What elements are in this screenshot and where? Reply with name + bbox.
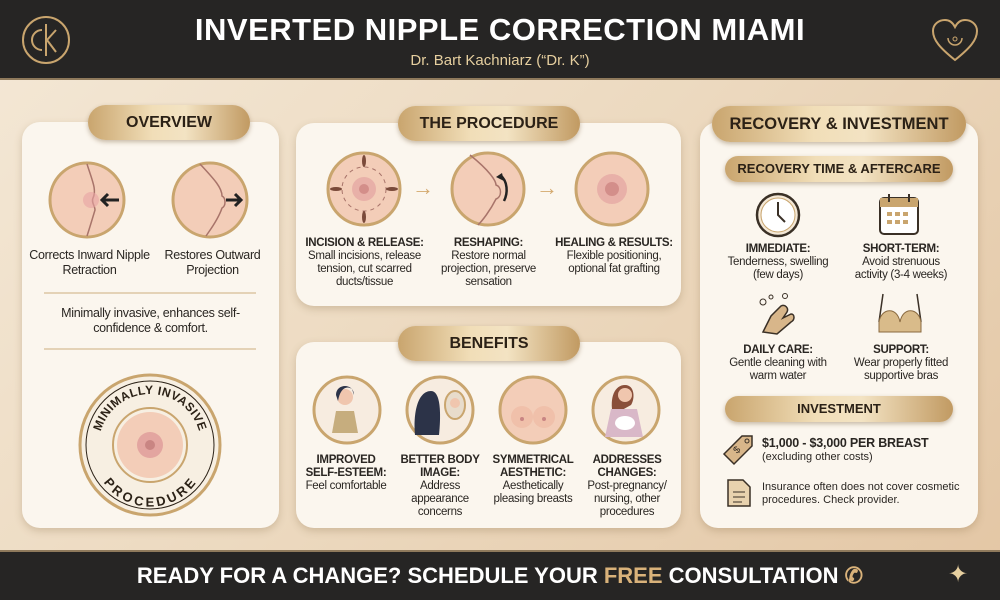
- icon: heart: [932, 19, 978, 62]
- text: immediate: Tenderness, swelling (few days): [728, 256, 828, 281]
- text: support: SUPPORT:: [873, 344, 929, 356]
- text: better body image: Address appearance concerns: [411, 480, 469, 518]
- text: symmetrical: [492, 454, 574, 505]
- icon: washing hand: [760, 293, 795, 335]
- title: INVERTED NIPPLE CORRECTION MIAMI: [195, 12, 805, 47]
- icon: inward nipple: [48, 162, 126, 238]
- text: minimally invasive summary: Minimally invasive, enhances self-confidence & comfort.: [61, 306, 240, 335]
- panel: benefits: [296, 342, 681, 528]
- text: immediate: IMMEDIATE:: [746, 243, 810, 255]
- badge: minimally invasive procedure: [78, 374, 222, 516]
- text: daily care: Gentle cleaning with warm water: [729, 357, 827, 382]
- text: symmetrical: SYMMETRICAL AESTHETIC:: [492, 454, 574, 479]
- text: addresses changes: Post-pregnancy/ nursing, other procedures: [587, 480, 667, 518]
- text: restores outward: Restores Outward Projection: [165, 248, 260, 277]
- text: healing: HEALING & RESULTS:: [555, 237, 673, 249]
- heading: overview: [88, 105, 250, 140]
- icon: healed: [574, 152, 650, 226]
- badge: minimally invasive procedure: PROCEDURE: [104, 477, 196, 507]
- subheading: investment: INVESTMENT: [797, 401, 881, 416]
- panel: procedure: [296, 123, 681, 306]
- panel: recovery & investment: [700, 122, 978, 528]
- heading: recovery & investment: [712, 106, 966, 142]
- icon: calendar: [879, 194, 919, 235]
- heading: benefits: [398, 326, 580, 361]
- text: immediate: [728, 243, 828, 281]
- text: improved self-esteem: IMPROVED SELF-ESTEEM:: [306, 454, 386, 479]
- text: improved self-esteem: [306, 454, 386, 492]
- icon: price tag: [723, 435, 753, 465]
- icon: body image: [406, 376, 474, 444]
- text: healing: [555, 237, 673, 275]
- text: addresses changes: ADDRESSES CHANGES:: [593, 454, 661, 479]
- panel: recovery & investment: (excluding other costs): [762, 451, 873, 463]
- heading: the procedure: [398, 106, 580, 141]
- subheading: investment: [725, 396, 953, 422]
- text: reshaping: Restore normal projection, preserve sensation: [441, 250, 536, 288]
- text: corrects inward: Corrects Inward Nipple Retraction: [29, 248, 150, 277]
- footer bar: [0, 550, 1000, 600]
- text: incision & release: INCISION & RELEASE:: [305, 237, 424, 249]
- text: short-term: Avoid strenuous activity (3-4 weeks): [855, 256, 947, 281]
- text: incision & release: Small incisions, release tension, cut scarred ducts/tissue: [308, 250, 421, 288]
- icon: self-esteem: [312, 376, 382, 444]
- heading: benefits: BENEFITS: [449, 335, 529, 352]
- icon: outward nipple: [172, 162, 248, 238]
- icon: document: [727, 479, 751, 507]
- header bar: [0, 0, 1000, 80]
- text: improved self-esteem: Feel comfortable: [306, 480, 386, 492]
- text: addresses changes: [587, 454, 667, 518]
- badge: minimally invasive procedure: MINIMALLY INVASIVE: [93, 386, 207, 431]
- heading: the procedure: THE PROCEDURE: [420, 115, 558, 132]
- text: support: [854, 344, 948, 382]
- text: daily care: [729, 344, 827, 382]
- arrow: →: [536, 175, 558, 200]
- icon: clock: [756, 192, 800, 238]
- text: better body image: [400, 454, 480, 518]
- icon: incision: [326, 152, 402, 226]
- text: price: $1,000 - $3,000 PER BREAST: [762, 436, 928, 450]
- icon: symmetrical: [498, 376, 568, 444]
- text: healing: Flexible positioning, optional fat grafting: [567, 250, 661, 275]
- text: insurance: Insurance often does not cover cosmetic procedures. Check provider.: [762, 481, 960, 506]
- logo: dk: [22, 16, 70, 64]
- text: symmetrical: Aesthetically pleasing breasts: [494, 480, 572, 505]
- icon: reshaping: [450, 152, 526, 226]
- arrow: →: [412, 175, 434, 200]
- text: better body image: BETTER BODY IMAGE:: [400, 454, 480, 479]
- icon: bra: [878, 294, 922, 332]
- icon: nursing: [592, 376, 660, 444]
- icon: price tag: $: [731, 444, 743, 456]
- text: reshaping: RESHAPING:: [454, 237, 523, 249]
- heading: overview: OVERVIEW: [126, 114, 212, 131]
- subheading: recovery time: [725, 156, 953, 182]
- icon: sparkle: ✦: [948, 561, 968, 588]
- text: support: Wear properly fitted supportive bras: [854, 357, 948, 382]
- heading: recovery & investment: RECOVERY & INVESTMENT: [729, 115, 949, 133]
- subheading: recovery time: RECOVERY TIME & AFTERCARE: [737, 161, 941, 176]
- footer call to action: READY FOR A CHANGE? SCHEDULE YOUR FREE CONSULTATION ✆: [137, 563, 863, 588]
- text: short-term: [855, 243, 947, 281]
- subtitle: Dr. Bart Kachniarz (“Dr. K”): [410, 52, 590, 69]
- text: short-term: SHORT-TERM:: [863, 243, 939, 255]
- text: daily care: DAILY CARE:: [743, 344, 813, 356]
- panel: overview: [22, 122, 279, 528]
